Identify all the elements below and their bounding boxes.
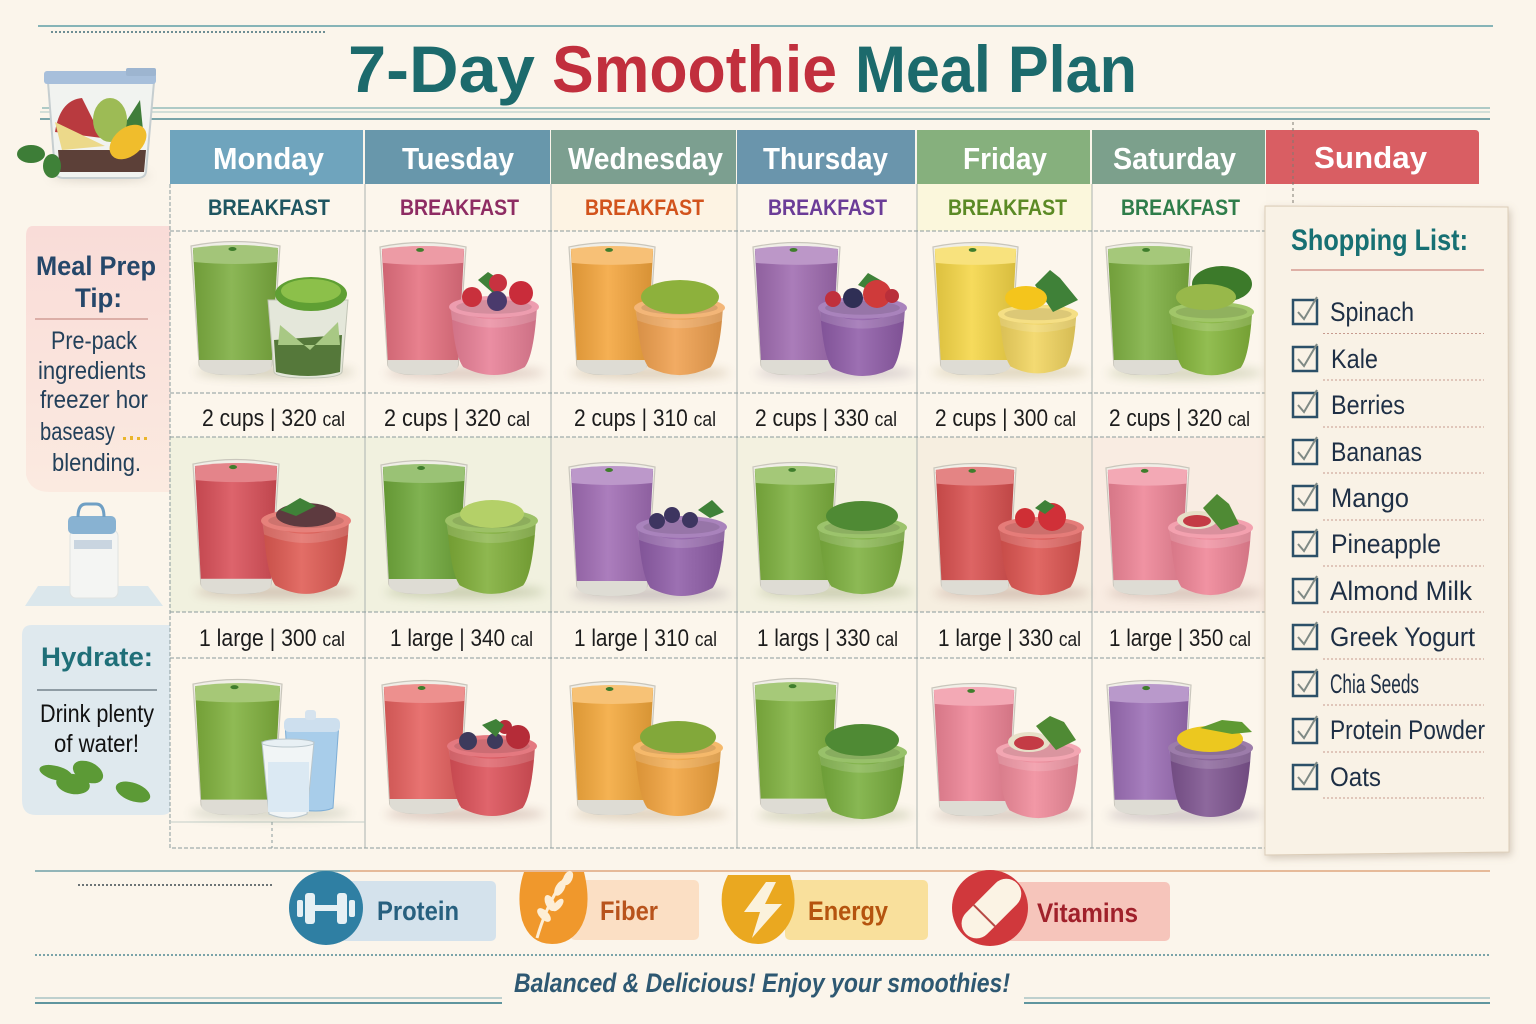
smoothie: tuesday red berries bbox=[382, 680, 545, 820]
heading: shopping list: Shopping List: bbox=[1291, 224, 1468, 257]
header: thursday bbox=[737, 130, 915, 184]
heading: meal prep tip: Meal Prep bbox=[36, 251, 156, 281]
shopping items: Chia Seeds bbox=[1330, 669, 1419, 699]
smoothie: monday red bbox=[193, 460, 355, 598]
breakfast labels: BREAKFAST bbox=[1121, 195, 1240, 220]
tip body text: baseasy bbox=[40, 418, 115, 446]
row 2 smoothies bbox=[193, 460, 1263, 600]
meal plan grid bbox=[170, 122, 1479, 848]
header: saturday bbox=[1092, 130, 1265, 184]
smoothie: wednesday orange bbox=[570, 682, 728, 820]
tip body text: blending. bbox=[52, 449, 141, 477]
tip body text: Pre-pack bbox=[51, 327, 137, 355]
row 1 amounts: 2 cups | 310 cal bbox=[574, 405, 716, 432]
legend: protein bbox=[289, 871, 496, 945]
smoothie: saturday pink fig bbox=[1106, 463, 1263, 599]
header: wednesday bbox=[551, 130, 736, 184]
panel: shopping list bbox=[1265, 206, 1509, 855]
icon: pill bbox=[955, 873, 1027, 945]
shopping items: Pineapple bbox=[1331, 529, 1441, 559]
header: monday: Monday bbox=[213, 141, 325, 176]
legend: energy: Energy bbox=[808, 896, 888, 926]
header: friday: Friday bbox=[963, 141, 1048, 176]
smoothie: thursday purple berries bbox=[753, 242, 915, 379]
smoothie: tuesday green lime bbox=[381, 460, 545, 598]
row 1 amounts: 2 cups | 320 cal bbox=[384, 405, 530, 432]
smoothie: monday green with jar bbox=[191, 242, 355, 378]
legend: vitamins bbox=[952, 870, 1170, 946]
item divider lines bbox=[1323, 334, 1484, 798]
legend: fiber bbox=[519, 870, 699, 944]
breakfast labels: BREAKFAST bbox=[948, 195, 1067, 220]
breakfast labels: BREAKFAST bbox=[208, 195, 331, 220]
breakfast labels: BREAKFAST bbox=[400, 195, 519, 220]
row 2 amounts: 1 large | 340 cal bbox=[390, 625, 533, 652]
tip body text: freezer hor bbox=[40, 386, 148, 414]
smoothie: tuesday pink berries bbox=[380, 242, 545, 379]
icon: wheat bbox=[536, 870, 575, 938]
shopping items: Berries bbox=[1331, 390, 1405, 420]
icon: spinach leaves bbox=[38, 756, 153, 807]
breakfast labels: BREAKFAST bbox=[585, 195, 704, 220]
row 1 smoothies bbox=[191, 242, 1263, 379]
smoothie: saturday green kale bbox=[1106, 242, 1263, 379]
header: monday bbox=[170, 130, 363, 184]
header: saturday: Saturday bbox=[1113, 141, 1237, 176]
header: tuesday bbox=[365, 130, 550, 184]
shopping items: Kale bbox=[1331, 344, 1378, 374]
row 1 amounts: 2 cups | 320 cal bbox=[202, 405, 345, 432]
header: wednesday: Wednesday bbox=[568, 141, 724, 176]
header: sunday: Sunday bbox=[1314, 140, 1428, 175]
heading: hydrate: Hydrate: bbox=[41, 642, 153, 672]
row 2 amounts: 1 large | 330 cal bbox=[938, 625, 1081, 652]
smoothie: friday yellow mango bbox=[932, 242, 1088, 378]
smoothie: monday green with water bbox=[190, 680, 350, 819]
row 3 smoothies bbox=[190, 679, 1263, 821]
heading: meal prep tip bbox=[36, 251, 156, 313]
footer tagline: Balanced & Delicious! Enjoy your smoothies! bbox=[514, 968, 1010, 998]
smoothie: thursday green bbox=[753, 462, 913, 598]
breakfast labels bbox=[208, 195, 1240, 220]
header: thursday: Thursday bbox=[763, 141, 889, 176]
day headers bbox=[170, 122, 1479, 205]
icon: jar on mat bbox=[25, 504, 163, 606]
row 2 amounts: 1 large | 310 cal bbox=[574, 625, 717, 652]
tip body text: ingredients bbox=[38, 357, 146, 385]
header: sunday bbox=[1266, 122, 1479, 205]
tip body text bbox=[38, 327, 148, 477]
header: tuesday: Tuesday bbox=[402, 141, 515, 176]
shopping items bbox=[1330, 297, 1485, 792]
row 1 amounts: 2 cups | 300 cal bbox=[935, 405, 1076, 432]
icon: meal prep container bbox=[17, 68, 156, 180]
header: friday bbox=[917, 130, 1090, 184]
shopping items: Spinach bbox=[1330, 297, 1414, 327]
hydrate body text: Drink plenty bbox=[40, 700, 154, 728]
row 2 amounts: 1 large | 300 cal bbox=[199, 625, 345, 652]
grid backgrounds bbox=[170, 184, 1266, 848]
title: 7-Day bbox=[348, 32, 535, 106]
title: Smoothie bbox=[552, 32, 837, 106]
hydrate body text bbox=[40, 700, 154, 758]
legend: protein: Protein bbox=[377, 896, 459, 926]
title: Meal Plan bbox=[855, 32, 1137, 106]
smoothie: friday pink fig bbox=[932, 683, 1088, 821]
row 2 amounts: 1 largs | 330 cal bbox=[757, 625, 898, 652]
legend: vitamins: Vitamins bbox=[1037, 898, 1138, 928]
legend: fiber: Fiber bbox=[600, 896, 658, 926]
shopping items: Protein Powder bbox=[1330, 715, 1485, 745]
smoothie: thursday green bbox=[753, 679, 913, 821]
shopping items: Mango bbox=[1331, 483, 1409, 513]
legend: energy bbox=[722, 875, 928, 944]
shopping items: Greek Yogurt bbox=[1330, 622, 1475, 652]
row 1 amounts: 2 cups | 330 cal bbox=[755, 405, 897, 432]
smoothie: saturday purple mango bbox=[1107, 681, 1263, 821]
shopping items: Almond Milk bbox=[1330, 576, 1472, 606]
checkboxes bbox=[1293, 297, 1317, 789]
icon: dumbbell bbox=[297, 893, 355, 924]
row 1 amounts bbox=[202, 405, 1250, 432]
shopping items: Oats bbox=[1330, 762, 1381, 792]
breakfast labels: BREAKFAST bbox=[768, 195, 887, 220]
bottom rule lines bbox=[35, 871, 1490, 1003]
icon: lightning bolt bbox=[744, 882, 782, 938]
smoothie: wednesday orange bbox=[569, 242, 730, 379]
row 2 amounts bbox=[199, 625, 1251, 652]
shopping items: Bananas bbox=[1331, 437, 1422, 467]
smoothie: wednesday purple blueberry bbox=[569, 462, 730, 600]
title bbox=[348, 32, 1137, 106]
row 1 amounts: 2 cups | 320 cal bbox=[1109, 405, 1250, 432]
smoothie: friday red strawberry bbox=[934, 463, 1090, 599]
panel: meal prep tip bbox=[26, 226, 170, 492]
panel: hydrate bbox=[22, 625, 170, 815]
row 2 amounts: 1 large | 350 cal bbox=[1109, 625, 1251, 652]
hydrate body text: of water! bbox=[54, 730, 139, 758]
heading: meal prep tip: Tip: bbox=[75, 283, 122, 313]
top rule lines bbox=[38, 26, 1493, 119]
